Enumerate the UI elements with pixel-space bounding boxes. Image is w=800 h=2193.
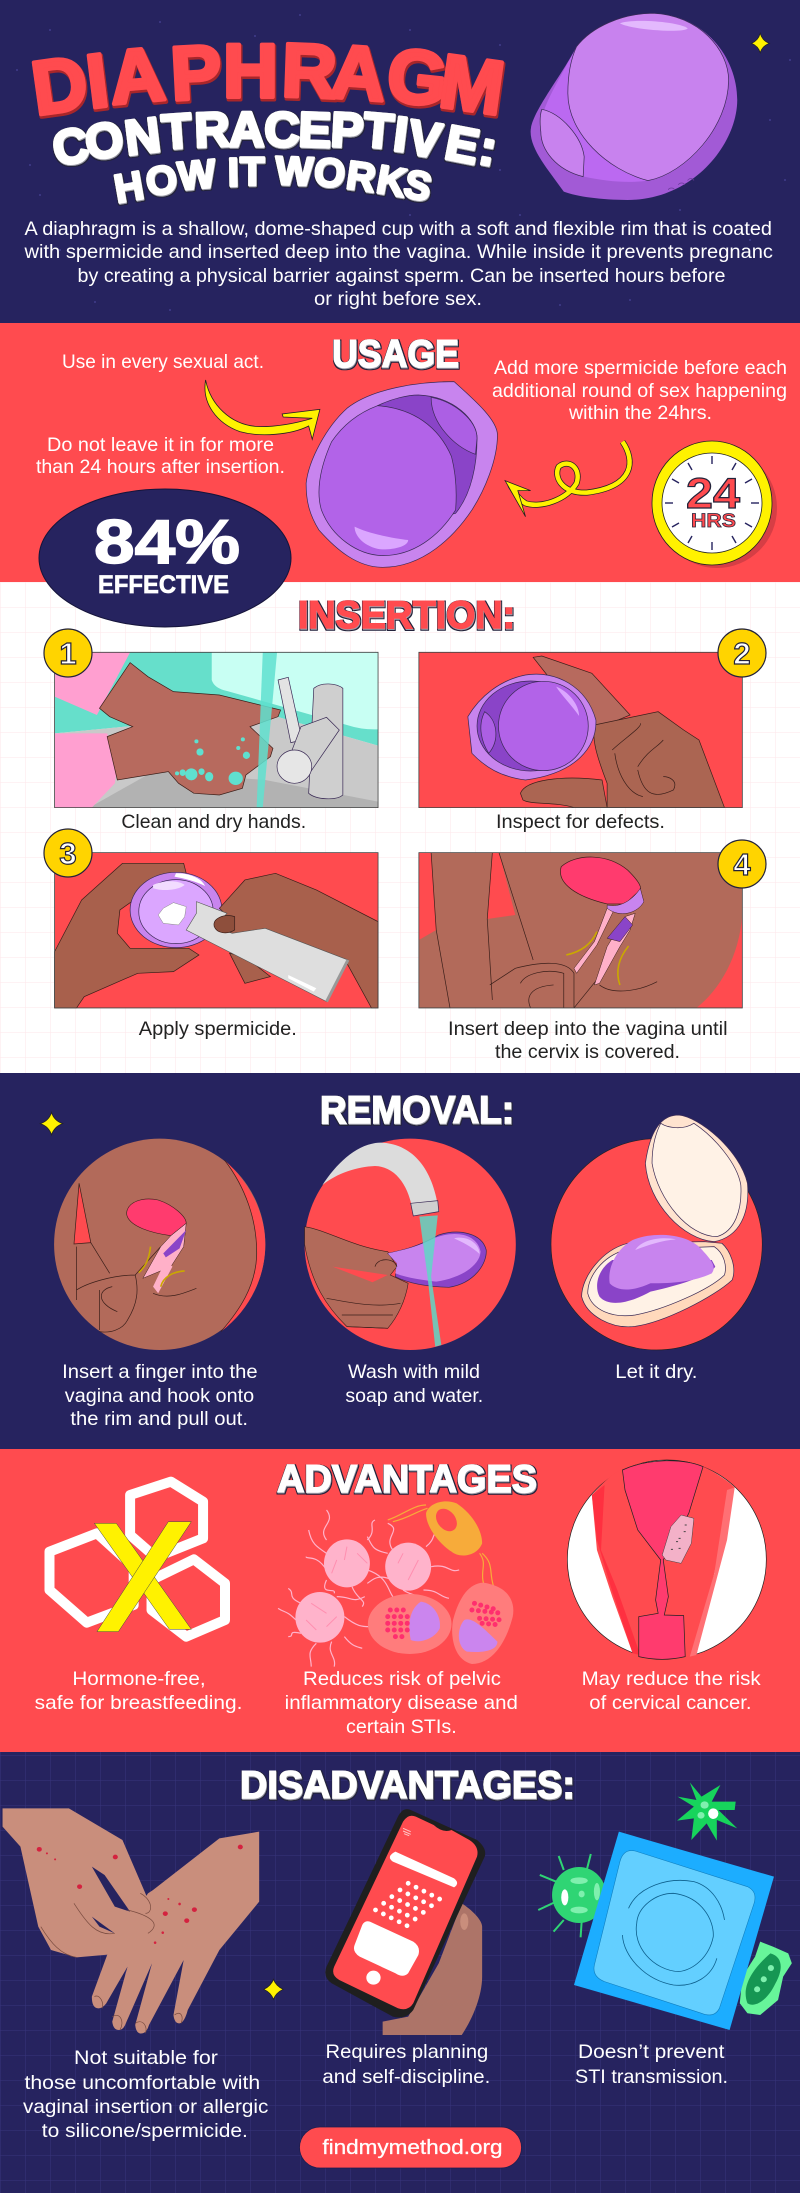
usage text: 24 hours <box>36 434 285 478</box>
usage text: add spermicide: within the 24hrs. <box>568 402 712 424</box>
advantages captions: Reduces risk of pelvic <box>303 1668 501 1690</box>
heading: usage: USAGE <box>332 333 459 376</box>
wrapper <box>574 1832 774 2030</box>
insertion captions: Insert deep into the vagina until <box>448 1018 728 1040</box>
step badges: 2 <box>733 636 751 671</box>
removal captions: soap and water. <box>345 1385 483 1407</box>
heading: disadvantages: DISADVANTAGES: <box>240 1764 575 1807</box>
disadvantages captions <box>23 2041 728 2142</box>
germ: virus <box>538 1854 606 1937</box>
advantages captions: inflammatory disease and <box>285 1692 518 1714</box>
footer pill: findmymethod.org: findmymethod.org <box>322 2136 502 2159</box>
arrow: curly from right <box>505 442 630 517</box>
insertion captions: Apply spermicide. <box>139 1018 297 1040</box>
disadvantages captions: Not suitable for <box>74 2047 218 2069</box>
faucet <box>277 677 343 799</box>
removal captions: the rim and pull out. <box>70 1408 248 1430</box>
disadvantages captions: Requires planning <box>326 2041 488 2063</box>
heading: removal: REMOVAL: <box>320 1089 514 1132</box>
advantages captions: certain STIs. <box>346 1716 457 1738</box>
icon: bacteria and cells <box>278 1501 513 1667</box>
panel 1: washing hands <box>55 652 378 808</box>
disadvantages captions: and self-discipline. <box>322 2066 490 2088</box>
heading: advantages: ADVANTAGES <box>277 1458 537 1501</box>
step badges: 4 <box>733 847 751 882</box>
advantages captions: of cervical cancer. <box>589 1692 752 1714</box>
icon: hormone-free hexagons <box>49 1482 225 1637</box>
step badges: 1 <box>59 636 77 671</box>
arrow: to diaphragm from left <box>205 380 320 439</box>
removal circle 1 <box>54 1139 265 1350</box>
badge: 84% effective: EFFECTIVE <box>98 571 229 599</box>
disadvantages captions: Doesn’t prevent <box>578 2041 725 2063</box>
disadvantages captions: STI transmission. <box>575 2066 728 2088</box>
germ: spiky <box>677 1782 737 1841</box>
intro text <box>23 218 773 310</box>
intro text: or right before sex. <box>314 288 482 310</box>
disadvantages captions: vaginal insertion or allergic <box>23 2096 269 2118</box>
usage text: 24 hours: Do not leave it in for more <box>47 434 274 456</box>
icon: diaphragm usage <box>306 382 497 567</box>
insertion captions <box>121 811 728 1063</box>
title <box>27 28 509 212</box>
removal captions <box>62 1361 697 1430</box>
footer pill: findmymethod.org <box>300 2127 522 2168</box>
icon: diaphragm dome <box>531 13 737 200</box>
icon: star <box>752 33 769 53</box>
icon: cervix <box>567 1460 766 1659</box>
step badges <box>44 629 766 888</box>
insertion captions: Inspect for defects. <box>496 811 665 833</box>
icon: 24 hrs clock: HRS <box>691 511 736 532</box>
icon: star <box>40 1112 63 1135</box>
usage text: add spermicide: Add more spermicide before each <box>494 357 787 379</box>
removal captions: Wash with mild <box>348 1361 480 1383</box>
insertion captions: Clean and dry hands. <box>121 811 306 833</box>
step badges: 3 <box>59 836 77 871</box>
icon: hands with rash <box>3 1808 259 2034</box>
intro text: A diaphragm is a shallow, dome-shaped cup with a soft and flexible rim that is coated <box>24 218 772 240</box>
panel 3: applying spermicide <box>55 853 378 1008</box>
removal captions: Insert a finger into the <box>62 1361 258 1383</box>
icon: 24 hrs clock: 24 <box>686 470 740 518</box>
panel 4: inserting diaphragm <box>419 853 742 1008</box>
intro text: with spermicide and inserted deep into the vagina. While inside it prevents pregnanc <box>23 241 773 263</box>
badge: 84% effective <box>39 489 291 627</box>
title: HOW IT WORKS <box>111 149 435 212</box>
intro text: by creating a physical barrier against sperm. Can be inserted hours before <box>78 265 726 287</box>
usage text: add spermicide <box>492 357 787 424</box>
advantages captions: safe for breastfeeding. <box>35 1692 242 1714</box>
disadvantages captions: those uncomfortable with <box>24 2072 260 2094</box>
germ: bacillus <box>740 1942 792 2015</box>
usage text: every act: Use in every sexual act. <box>62 351 264 373</box>
disadvantages captions: to silicone/spermicide. <box>42 2120 248 2142</box>
insertion captions: the cervix is covered. <box>495 1041 680 1063</box>
removal captions: Let it dry. <box>615 1361 697 1383</box>
panel 2: inspecting diaphragm <box>419 652 742 808</box>
removal captions: vagina and hook onto <box>65 1385 254 1407</box>
advantages captions: Hormone-free, <box>72 1668 206 1690</box>
advantages captions: May reduce the risk <box>582 1668 761 1690</box>
icon: condom wrapper and germs <box>538 1782 792 2030</box>
badge: 84% effective: 84% <box>94 508 240 577</box>
usage text: add spermicide: additional round of sex happening <box>492 380 787 402</box>
advantages captions <box>35 1668 761 1738</box>
usage text: 24 hours: than 24 hours after insertion. <box>36 456 285 478</box>
removal circle 2 <box>305 1139 516 1350</box>
icon: smartphone and hand <box>325 1809 485 2035</box>
icon: star <box>264 1979 283 1999</box>
removal circle 3 <box>551 1115 762 1350</box>
title: DIAPHRAGM <box>27 28 509 132</box>
icon: 24 hrs clock <box>652 441 777 568</box>
title: CONTRACEPTIVE: <box>49 103 501 177</box>
heading: insertion: INSERTION: <box>298 594 515 637</box>
